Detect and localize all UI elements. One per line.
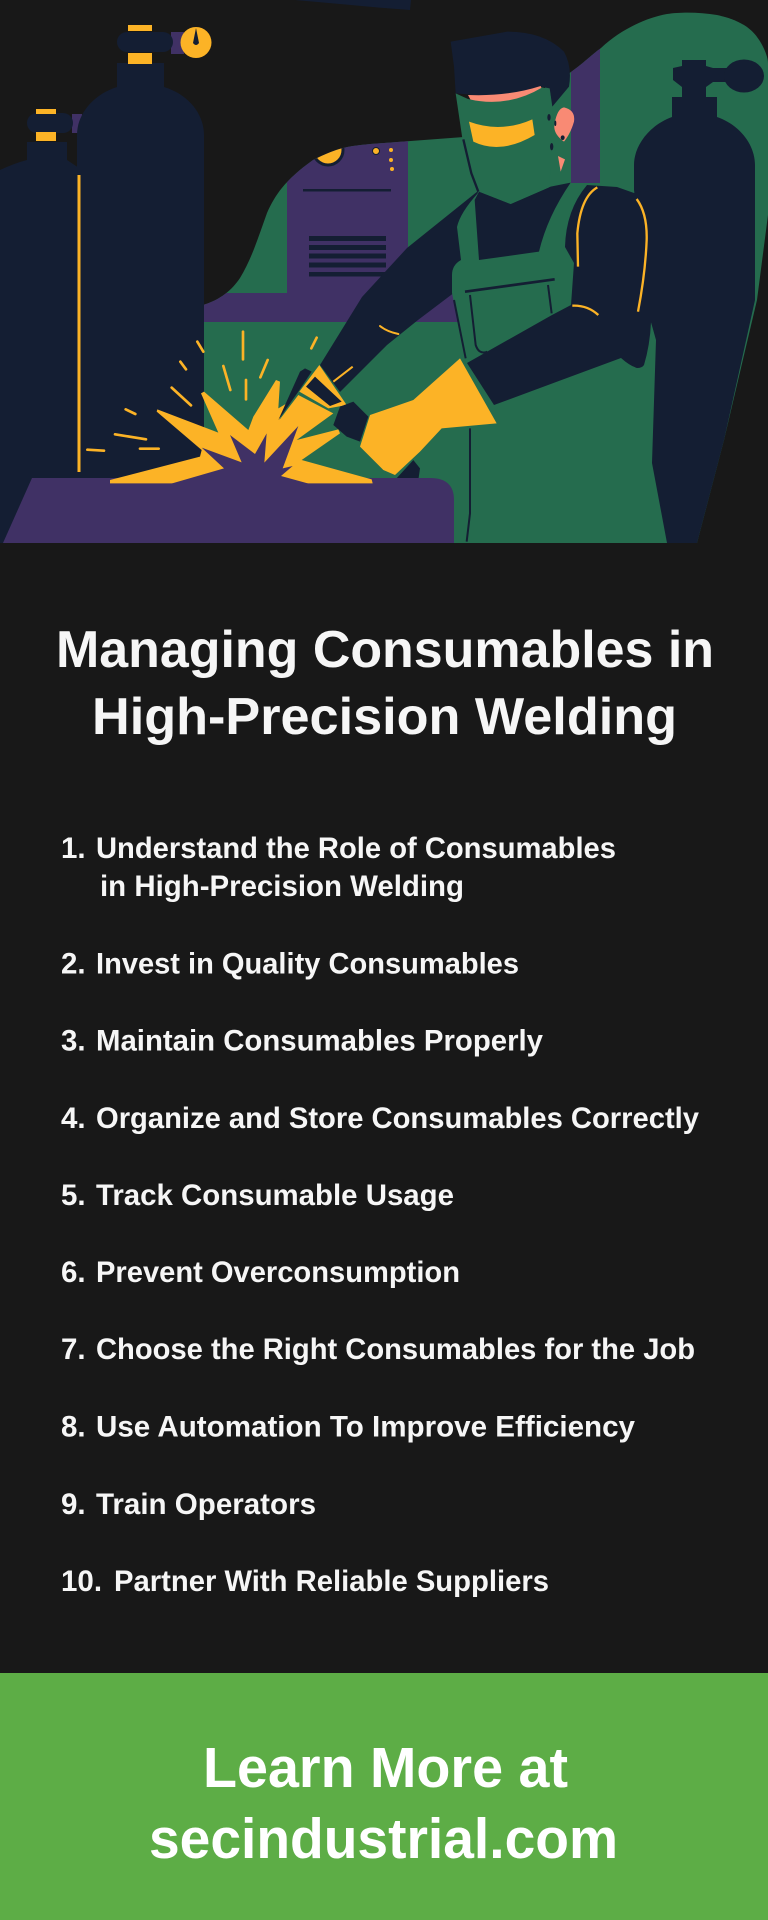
welding machine panel xyxy=(200,40,600,322)
banner text: Learn More at xyxy=(203,1736,568,1800)
item 9: 9. xyxy=(61,1488,86,1521)
welding spark burst xyxy=(87,332,373,484)
welder right shoulder and forearm xyxy=(467,185,656,405)
welding torch and gloved hand xyxy=(278,358,497,475)
stray navy shape at top edge xyxy=(295,0,411,10)
title: Managing Consumables in xyxy=(56,621,714,679)
numbered list of consumables tips xyxy=(61,832,700,1598)
green background blob xyxy=(203,13,768,543)
item 6: Prevent Overconsumption xyxy=(96,1256,460,1289)
item 8: 8. xyxy=(61,1411,86,1444)
item 1: in High-Precision Welding xyxy=(100,870,464,903)
item 10: 10. xyxy=(61,1565,102,1598)
chest xyxy=(475,183,571,260)
item 1 xyxy=(61,832,616,903)
torch grip xyxy=(333,402,368,442)
torch tip xyxy=(278,368,312,420)
small left gas cylinder xyxy=(0,109,82,543)
welder upper left arm xyxy=(320,191,478,392)
neck sliver xyxy=(558,156,565,172)
flying sparks xyxy=(87,332,317,451)
welder apron xyxy=(452,183,600,362)
title: High-Precision Welding xyxy=(92,688,677,746)
banner text: secindustrial.com xyxy=(149,1807,618,1871)
item 1: 1. xyxy=(61,832,86,865)
item 8: Use Automation To Improve Efficiency xyxy=(96,1411,636,1444)
helmet strap line xyxy=(463,139,478,192)
forehead xyxy=(468,86,543,104)
item 5: Track Consumable Usage xyxy=(96,1179,454,1212)
hair xyxy=(451,32,570,107)
item 5: 5. xyxy=(61,1179,86,1212)
item 7: Choose the Right Consumables for the Job xyxy=(96,1333,695,1366)
banner text xyxy=(149,1736,618,1871)
title xyxy=(56,621,714,746)
hero illustration: welder at work xyxy=(0,0,768,543)
ear xyxy=(554,107,574,142)
banner background xyxy=(0,1673,768,1920)
item 4: 4. xyxy=(61,1102,86,1135)
yellow glove xyxy=(360,358,497,475)
gripping thumb xyxy=(380,326,420,480)
spark rays xyxy=(110,380,373,483)
item 2: 2. xyxy=(61,948,86,980)
item 6: 6. xyxy=(61,1256,86,1289)
sleeve stitch lines xyxy=(572,187,647,315)
helmet window xyxy=(469,119,535,147)
item 7: 7. xyxy=(61,1333,86,1366)
item 4: Organize and Store Consumables Correctly xyxy=(96,1102,700,1135)
workbench table xyxy=(3,478,454,543)
scorch on the metal xyxy=(170,426,310,484)
item 10: Partner With Reliable Suppliers xyxy=(114,1565,549,1598)
torch nozzle xyxy=(299,365,347,408)
right gas cylinder xyxy=(634,60,764,543)
apron pocket lines xyxy=(454,279,555,542)
helmet visor shell xyxy=(456,87,552,204)
item 1: Understand the Role of Consumables xyxy=(96,832,616,865)
helmet fittings xyxy=(547,114,565,150)
call to action banner xyxy=(0,1673,768,1920)
large left gas cylinder with gauge xyxy=(77,25,212,480)
item 3: Maintain Consumables Properly xyxy=(96,1025,544,1058)
item 9: Train Operators xyxy=(96,1488,316,1521)
welder head and helmet xyxy=(451,32,574,260)
item 3: 3. xyxy=(61,1025,86,1058)
item 2: Invest in Quality Consumables xyxy=(96,948,519,980)
